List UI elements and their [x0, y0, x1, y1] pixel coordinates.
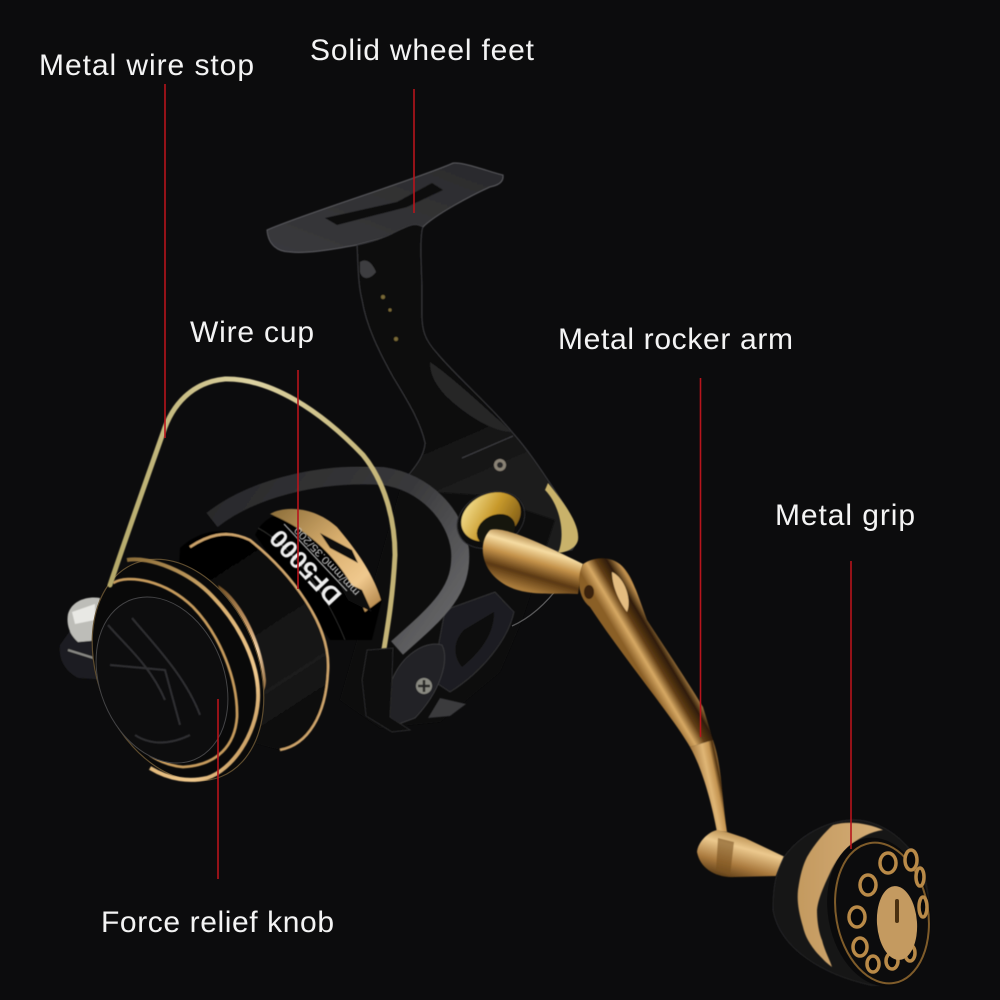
handle knob [773, 820, 942, 995]
knob face [824, 835, 940, 991]
spool model text: DF5000 [264, 524, 347, 610]
front cap [72, 577, 252, 783]
rocker arm [579, 558, 727, 832]
line roller arm [362, 644, 445, 732]
leader line: metal rocker arm [700, 378, 702, 737]
label: solid wheel feet: Solid wheel feet [310, 34, 535, 67]
label: wire cup: Wire cup [190, 316, 314, 349]
label: metal grip: Metal grip [775, 499, 915, 532]
leader line: metal wire stop [164, 84, 166, 438]
knob black ring [816, 829, 942, 995]
rear drag cap [60, 598, 110, 680]
handle collar [448, 481, 534, 559]
fishing reel illustration [60, 163, 942, 995]
reel foot [267, 163, 503, 253]
leader line: wire cup [297, 370, 299, 589]
leader line: solid wheel feet [413, 89, 415, 213]
label: metal rocker arm: Metal rocker arm [558, 323, 793, 356]
spool skirt [255, 509, 382, 640]
label: force relief knob: Force relief knob [101, 906, 334, 939]
bail wire [110, 379, 395, 655]
reel stem [357, 225, 576, 560]
leader line: metal grip [850, 561, 852, 849]
label: metal wire stop: Metal wire stop [39, 49, 254, 82]
spool neck [218, 585, 266, 700]
side body frame [428, 592, 514, 718]
rocker arm cone [483, 529, 583, 594]
rotor arm [212, 475, 460, 648]
spool underline [284, 524, 347, 591]
front inner gold ring [113, 579, 237, 767]
leader line: force relief knob [217, 699, 219, 879]
cap ridges [108, 618, 200, 742]
knob gold band [798, 823, 883, 967]
spool front face [61, 533, 295, 807]
rocker arm lower joint [697, 830, 785, 877]
translucent side plate edge [512, 585, 560, 626]
front gold ring [127, 559, 258, 780]
knob slot [895, 899, 899, 923]
knob centre cap [874, 885, 920, 961]
rear gold crescent [545, 483, 578, 553]
front lip [61, 533, 295, 807]
spool body [170, 524, 362, 750]
spool line capacity text: mm/mm0.35/200 [292, 524, 362, 598]
knob dome [773, 820, 928, 985]
reel body rear [340, 490, 555, 728]
knob holes [849, 850, 927, 972]
